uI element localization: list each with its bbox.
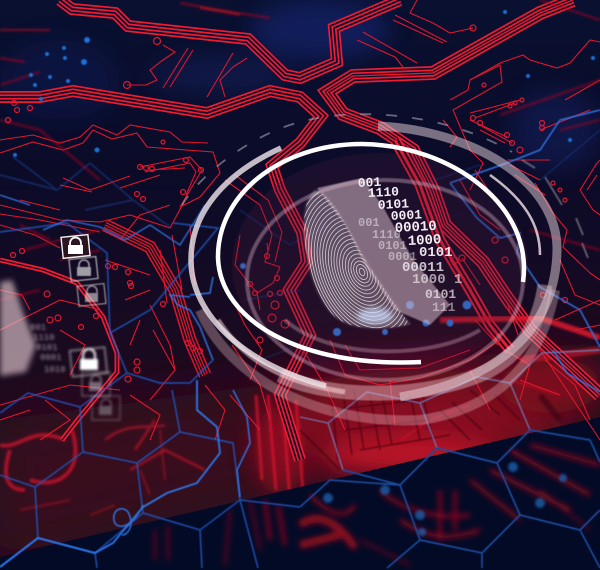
binary text: 00010 [394, 219, 437, 237]
binary text: 00011 [402, 260, 444, 276]
ring: outer right arc [378, 126, 557, 397]
ring: translucent lower bands [200, 285, 555, 420]
bus: left horizontal into centre [0, 91, 321, 460]
ring: inner translucent ellipse [247, 180, 523, 380]
bus: top right into ring [327, 0, 600, 395]
ring group [191, 126, 557, 420]
gray dashes: outer dashed arc [182, 114, 512, 205]
binary text: 1110 [367, 184, 400, 201]
plate: blurred red circuitry [0, 350, 600, 515]
circuit pads [6, 25, 568, 382]
fingerprint wash [304, 190, 410, 328]
icon: lock 5 [82, 372, 110, 396]
extra circuit density [0, 170, 600, 440]
left blurred binary: 1010 [44, 365, 66, 375]
binary text: 001 [358, 216, 380, 230]
blurred far traces [0, 0, 600, 300]
ring: thin right arc [490, 175, 540, 255]
icon: lock 6 [92, 396, 120, 420]
lower field: blurred red circuit [155, 445, 600, 565]
left blurred binary [30, 323, 66, 375]
background haze: blue top [0, 0, 600, 170]
fingerprint [304, 190, 410, 328]
left blurred binary: 1110 [33, 333, 55, 343]
binary text: 111 [432, 300, 456, 315]
plate: dark circuit texture [300, 385, 520, 470]
lock icons [61, 235, 120, 420]
binary text: 1000 [407, 232, 442, 250]
ring: outer left arc [191, 148, 326, 386]
binary text: 0101 [419, 245, 453, 261]
fingerprint glow [357, 308, 393, 324]
binary text: 001 [357, 175, 382, 191]
circuit traces: thin branches [0, 0, 600, 440]
binary text: 1110 [372, 228, 401, 242]
scanner disc [232, 153, 528, 377]
bus: right blurred [440, 318, 600, 338]
hex grid: pale lines on red plate [300, 350, 600, 470]
left blurred fingerprint [0, 280, 36, 376]
ring: bright main arc [218, 144, 524, 363]
left blurred binary: 0001 [40, 353, 62, 363]
pixelated data column [317, 178, 450, 325]
binary text: 0001 [388, 250, 417, 264]
blue nodes [240, 263, 472, 336]
binary text: 0001 [390, 207, 423, 224]
binary text: 0101 [378, 239, 407, 253]
binary text [357, 175, 462, 315]
bus: left fan bundle [105, 225, 205, 375]
blue dots [13, 10, 595, 157]
bus: left mid double trace [0, 260, 117, 440]
blurred blue nodes [323, 462, 567, 536]
binary text: 1000 1 [412, 272, 462, 288]
left blurred binary: 001 [30, 323, 47, 333]
gray dashes: right [522, 160, 588, 258]
icon: lock 2 [69, 257, 98, 281]
bus: top-left through top-centre [60, 0, 400, 78]
hex grid: dark blue lower field [300, 430, 600, 568]
binary text: 0101 [425, 287, 456, 302]
binary text: 0101 [377, 196, 410, 213]
bus: second bundle inside ring [395, 140, 510, 350]
dark lower field [0, 417, 600, 570]
hex grid: blue network upper and left [0, 130, 600, 568]
icon: lock 4 [70, 347, 107, 377]
left blurred binary: 0101 [36, 343, 58, 353]
icon: lock 1 [61, 235, 90, 258]
icon: lock 3 [77, 284, 106, 306]
lower red plate [0, 340, 600, 557]
